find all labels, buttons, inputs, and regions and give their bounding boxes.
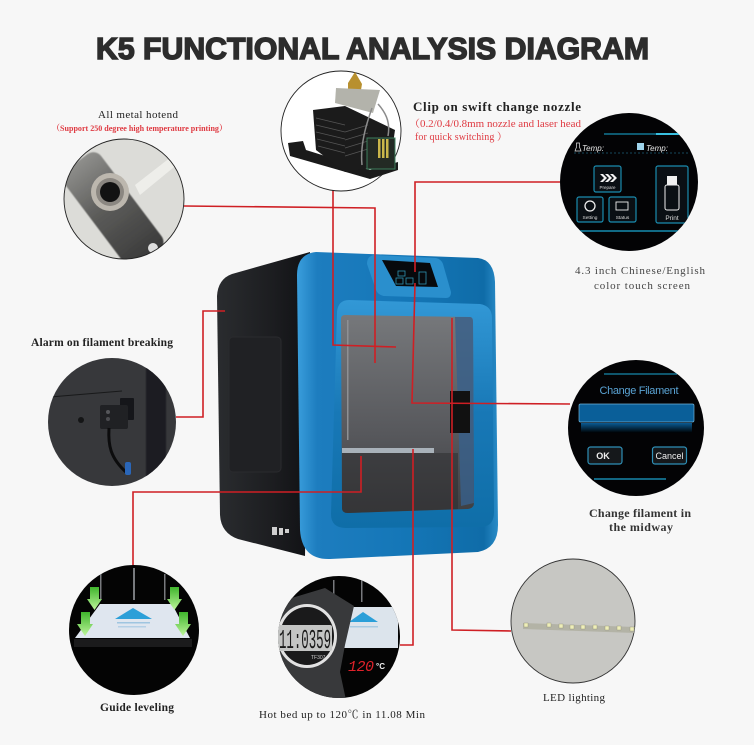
button: OK: OK — [596, 451, 610, 461]
photo: stopwatch and bed: 11:0359 — [279, 627, 331, 657]
arrow: rear-left — [77, 612, 93, 636]
photo: touch screen UI: Temp: — [646, 144, 668, 153]
photo: LED strip — [511, 559, 636, 683]
callout: change filament — [568, 360, 704, 534]
callout: hot bed — [259, 576, 426, 721]
title: K5 FUNCTIONAL ANALYSIS DIAGRAM — [96, 31, 649, 66]
button: Cancel: Cancel — [655, 451, 684, 461]
blue cable tie — [125, 462, 131, 475]
LED chips — [524, 623, 634, 631]
caption: Alarm on filament breaking — [31, 337, 173, 349]
PCB — [367, 138, 395, 169]
white bed — [75, 604, 190, 638]
callout: guide leveling — [69, 565, 199, 714]
printer blue front housing — [297, 252, 498, 559]
note: （Support 250 degree high temperature printing） — [52, 123, 227, 133]
heading: All metal hotend — [98, 109, 178, 121]
sensor body — [120, 398, 134, 420]
arrow: front-left — [87, 587, 102, 610]
temperature readout: 120 — [348, 659, 374, 676]
caption line 2: the midway — [609, 520, 673, 534]
touch screen — [382, 260, 438, 287]
bed logo — [115, 608, 152, 619]
bed temp — [637, 143, 644, 150]
printer glass window — [341, 315, 474, 513]
right glass tint — [455, 317, 474, 506]
base clip — [288, 141, 398, 179]
top status line — [604, 133, 680, 135]
heading: Clip on swift change nozzle — [413, 99, 581, 114]
callout: touch screen — [560, 113, 706, 292]
print bed — [342, 448, 434, 453]
divider — [574, 152, 688, 154]
photo: bed leveling — [69, 565, 199, 695]
brass nozzle — [348, 72, 362, 90]
progress reflection — [581, 423, 692, 433]
note line 2: for quick switching ） — [415, 131, 507, 143]
arrow: rear-right — [175, 612, 191, 636]
stopwatch model: TF307 — [311, 655, 326, 661]
leader: hot bed — [400, 449, 413, 645]
photo: stopwatch and bed — [270, 576, 400, 700]
leader: touch screen — [415, 182, 560, 272]
caption: Hot bed up to 120℃ in 11.08 Min — [259, 709, 426, 721]
guide rod — [347, 320, 348, 440]
printer USB ports — [272, 527, 289, 535]
printer black side panel — [217, 252, 310, 556]
heat sink — [313, 106, 395, 172]
leader: guide leveling — [133, 456, 361, 566]
leader: filament alarm — [176, 311, 225, 417]
stopwatch LCD — [277, 625, 332, 651]
temperature unit: °C — [376, 662, 385, 671]
printer side panel inset — [229, 337, 281, 472]
caption: LED lighting — [543, 692, 606, 704]
sensor cable — [109, 428, 127, 473]
photo: change filament dialog — [568, 360, 704, 496]
photo: filament sensor — [48, 355, 176, 490]
leader: change filament — [412, 283, 570, 404]
caption line 1: 4.3 inch Chinese/English — [575, 265, 706, 277]
button: prepare: Prepare — [599, 185, 616, 190]
leader: nozzle — [333, 170, 396, 347]
callout: LED lighting — [511, 559, 636, 704]
filament holder — [450, 391, 470, 433]
leader: LED — [452, 318, 511, 631]
callout: swift change nozzle — [281, 71, 581, 191]
heater wires — [362, 104, 389, 165]
callout: all metal hotend — [57, 111, 222, 260]
bottom status line — [578, 230, 680, 232]
heater block — [335, 88, 380, 113]
lower chamber — [342, 453, 458, 513]
leader: hotend — [184, 206, 375, 363]
gold contacts — [378, 139, 388, 158]
screen bezel — [367, 255, 451, 298]
nozzle temp: Temp: — [582, 144, 604, 153]
photo: nozzle assembly — [281, 71, 401, 191]
red leader lines — [133, 170, 570, 645]
note line 1: （0.2/0.4/0.8mm nozzle and laser head — [409, 118, 581, 130]
photo: touch screen UI — [560, 113, 698, 251]
heat sink fins — [316, 118, 368, 156]
3D printer illustration — [217, 252, 498, 559]
screen icons — [396, 271, 426, 284]
dialog title: Change Filament — [600, 385, 678, 397]
caption line 1: Change filament in — [589, 506, 691, 520]
printer window frame — [331, 300, 494, 528]
button: status: Status — [616, 215, 630, 221]
arrow: front-right — [167, 587, 182, 610]
stopwatch ring — [277, 604, 337, 668]
stopwatch body — [278, 588, 354, 698]
caption: Guide leveling — [100, 702, 174, 714]
callout: filament alarm — [31, 337, 176, 490]
caption line 2: color touch screen — [594, 280, 690, 292]
button: print: Print — [665, 215, 679, 222]
photo: hotend — [64, 138, 184, 260]
progress bar — [579, 404, 694, 422]
button: setting: Setting — [583, 215, 598, 221]
